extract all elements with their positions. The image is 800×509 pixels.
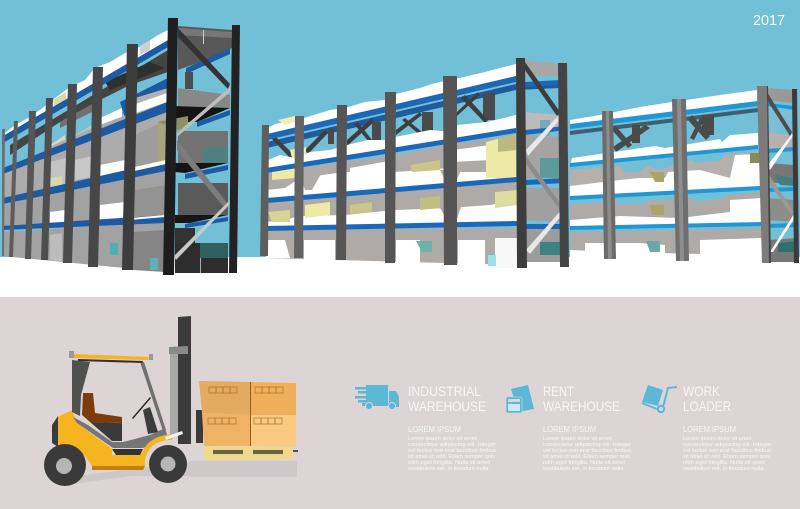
shelving rack: right section — [570, 86, 799, 263]
heading: work loader: LOADER — [683, 398, 731, 414]
text block: work loader: LOREM IPSUM — [683, 424, 736, 434]
text block: work loader: Lorem ipsum dolor sit amet, — [683, 436, 753, 442]
carton handling marks — [208, 387, 283, 424]
text block: industrial warehouse: vel lectus non erat faucibus finibus — [408, 448, 496, 454]
text block: industrial warehouse: Lorem ipsum dolor sit amet, — [408, 436, 478, 442]
text block: rent warehouse — [543, 424, 631, 472]
text block: work loader — [683, 424, 771, 472]
heading: industrial warehouse: WAREHOUSE — [408, 398, 486, 414]
text block: rent warehouse: sit amet id velit. Etiam semper quis — [543, 454, 630, 460]
text block: work loader: vel lectus non erat faucibus finibus — [683, 448, 771, 454]
ground shadow: forklift — [60, 462, 190, 486]
forklift body — [52, 351, 183, 470]
shelving rack: left section — [2, 18, 240, 275]
icon: invoice and calculator — [506, 385, 534, 413]
text block: work loader: nibh eget fringilla. Nulla sit amet — [683, 460, 765, 466]
text block: industrial warehouse: consectetur adipiscing elit. Integer — [408, 442, 496, 448]
icon: delivery truck — [355, 385, 399, 410]
left section end frame — [158, 18, 240, 275]
forklift mast — [169, 316, 191, 444]
text block: rent warehouse: Lorem ipsum dolor sit amet, — [543, 436, 613, 442]
heading: industrial warehouse — [408, 383, 486, 414]
year label: 2017 — [753, 12, 785, 29]
text block: work loader: consectetur adipiscing elit. Integer — [683, 442, 771, 448]
text block: industrial warehouse: vestibulum est, in tincidunt nulla. — [408, 466, 490, 472]
text block: rent warehouse: vestibulum est, in tincidunt nulla. — [543, 466, 625, 472]
text block: rent warehouse: vel lectus non erat faucibus finibus — [543, 448, 631, 454]
heading: work loader — [683, 383, 731, 414]
icon: hand truck with box — [642, 385, 677, 412]
fork carriage — [196, 410, 203, 443]
text block: work loader: sit amet id velit. Etiam semper quis — [683, 454, 770, 460]
stacked cartons — [199, 381, 296, 447]
shelving rack: middle section — [260, 58, 569, 268]
text block: rent warehouse: consectetur adipiscing elit. Integer — [543, 442, 631, 448]
text block: industrial warehouse — [408, 424, 496, 472]
text block: industrial warehouse: nibh eget fringilla. Nulla sit amet — [408, 460, 490, 466]
front wheel — [149, 445, 187, 483]
sky background — [0, 0, 800, 258]
heading: rent warehouse — [543, 383, 620, 414]
text block: industrial warehouse: sit amet id velit. Etiam semper quis — [408, 454, 495, 460]
right section end frame — [757, 86, 799, 263]
rear wheel — [44, 444, 86, 486]
warehouse floor — [0, 257, 800, 298]
heading: rent warehouse: WAREHOUSE — [543, 398, 620, 414]
text block: work loader: vestibulum est, in tincidunt nulla. — [683, 466, 765, 472]
forklift with loaded pallet — [44, 316, 298, 486]
text block: industrial warehouse: LOREM IPSUM — [408, 424, 461, 434]
heading: industrial warehouse: INDUSTRIAL — [408, 383, 481, 399]
middle section end frame — [516, 58, 569, 268]
text block: rent warehouse: LOREM IPSUM — [543, 424, 596, 434]
heading: rent warehouse: RENT — [543, 383, 574, 399]
bottom panel background — [0, 297, 800, 509]
pallet — [203, 446, 298, 460]
text block: rent warehouse: nibh eget fringilla. Nulla sit amet — [543, 460, 625, 466]
heading: work loader: WORK — [683, 383, 721, 399]
ground shadow: pallet — [190, 461, 297, 477]
